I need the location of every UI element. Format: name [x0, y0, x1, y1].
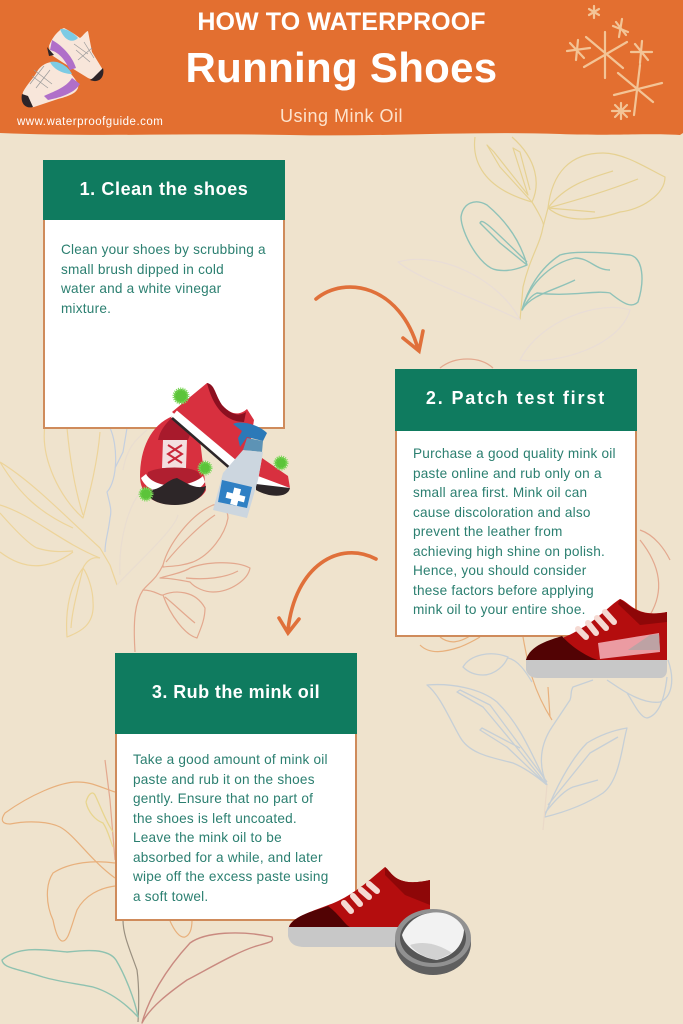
step 2 text: Hence, you should consider	[413, 563, 586, 578]
step 2 text: paste online and rub only on a	[413, 466, 602, 480]
icon: red shoe with patch test	[526, 599, 667, 678]
panel: step 3 rub the mink oil	[115, 653, 357, 921]
step 1 text: small brush dipped in cold	[61, 262, 224, 276]
step 1 heading	[43, 160, 285, 220]
step 3 text: absorbed for a while, and later	[133, 850, 323, 864]
step 1 heading: 1. Clean the shoes	[80, 179, 248, 199]
step 2 text: achieving high shine on polish.	[413, 544, 605, 558]
step 3 text: a soft towel.	[133, 888, 208, 904]
step 3 heading	[115, 653, 357, 734]
step 3 text: the shoes is left uncoated.	[133, 810, 297, 826]
step 1 text: Clean your shoes by scrubbing a	[61, 242, 266, 257]
icon: red shoes with germs and spray bottle	[138, 383, 290, 518]
step 2 text: mink oil to your entire shoe.	[413, 602, 586, 617]
step 3 heading: 3. Rub the mink oil	[152, 682, 320, 702]
step 3 text: paste and rub it on the shoes	[133, 772, 315, 786]
icon: running shoes pair	[22, 28, 104, 108]
step 2 text: prevent the leather from	[413, 524, 563, 539]
icon: sparkles	[567, 6, 662, 119]
header title: how to waterproof: HOW TO WATERPROOF	[197, 8, 486, 36]
step 2 heading	[395, 369, 637, 431]
icon: red shoe with mink oil jar	[288, 867, 471, 975]
step 2 text: cause discoloration and also	[413, 504, 591, 520]
step 1 text: mixture.	[61, 300, 111, 316]
step 3 text: Leave the mink oil to be	[133, 830, 282, 845]
website url: www.waterproofguide.com	[17, 116, 163, 128]
step 2 text: these factors before applying	[413, 582, 594, 598]
step 2 text: Purchase a good quality mink oil	[413, 446, 616, 461]
panel: step 1 clean the shoes	[43, 160, 285, 429]
step 3 text: wipe off the excess paste using	[133, 869, 328, 884]
step 3 text: Take a good amount of mink oil	[133, 752, 328, 767]
step 1 text	[61, 242, 266, 316]
step 3 text: gently. Ensure that no part of	[133, 791, 313, 806]
panel: step 2 patch test first	[395, 369, 637, 637]
header banner	[0, 0, 683, 136]
step 2 text: small area first. Mink oil can	[413, 485, 587, 500]
header subtitle: Using Mink Oil	[280, 106, 403, 126]
step 2 heading: 2. Patch test first	[426, 388, 606, 408]
step 3 text	[133, 752, 328, 904]
header title: running shoes: Running Shoes	[186, 44, 497, 91]
step 2 text	[413, 446, 616, 617]
step 1 text: water and a white vinegar	[61, 281, 221, 296]
